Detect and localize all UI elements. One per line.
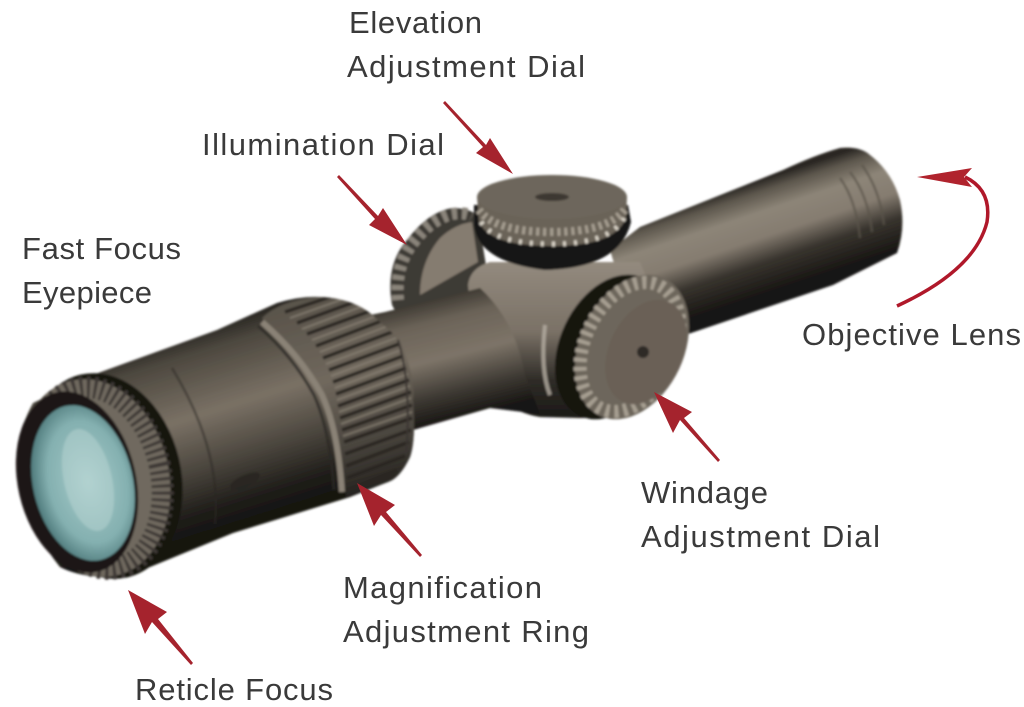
riflescope [0, 148, 902, 595]
label: windage adjustment dial: Adjustment Dial [641, 519, 880, 554]
label: windage adjustment dial [641, 475, 880, 554]
label: objective lens: Objective Lens [802, 317, 1021, 352]
label: fast focus eyepiece: Fast Focus [22, 231, 181, 266]
windage dial [533, 256, 711, 438]
illumination dial [390, 208, 490, 320]
label: elevation adjustment dial [347, 5, 585, 84]
lens rim [0, 379, 155, 585]
label: illumination dial: Illumination Dial [202, 127, 444, 162]
objective rings [840, 165, 884, 238]
housing seam highlight [543, 325, 550, 395]
label: fast focus eyepiece [22, 231, 181, 310]
main tube [365, 288, 540, 440]
arrow: elevation [443, 101, 513, 174]
arrow: windage [654, 392, 720, 462]
label: magnification adjustment ring [343, 570, 589, 649]
logo mark [228, 469, 262, 493]
label: elevation adjustment dial: Adjustment Dial [347, 49, 585, 84]
label: reticle focus: Reticle Focus [135, 672, 333, 707]
collar seam [172, 368, 216, 524]
arrow: reticle focus [128, 590, 193, 665]
label: windage adjustment dial: Windage [641, 475, 768, 510]
eyepiece body [18, 297, 414, 577]
label: magnification adjustment ring: Magnification [343, 570, 542, 605]
label: elevation adjustment dial: Elevation [349, 5, 482, 40]
label: magnification adjustment ring: Adjustment Ring [343, 614, 589, 649]
arrow: magnification [357, 483, 422, 557]
arrow: objective lens [897, 168, 988, 306]
reticle focus ring [0, 364, 190, 592]
objective tube [610, 148, 902, 350]
focus groove [6, 357, 202, 595]
magnification ring [258, 292, 414, 497]
turret housing [468, 262, 660, 418]
elevation dial [474, 175, 631, 270]
arrow: illumination [337, 175, 407, 245]
lens glass [17, 395, 149, 571]
label: fast focus eyepiece: Eyepiece [22, 275, 152, 310]
